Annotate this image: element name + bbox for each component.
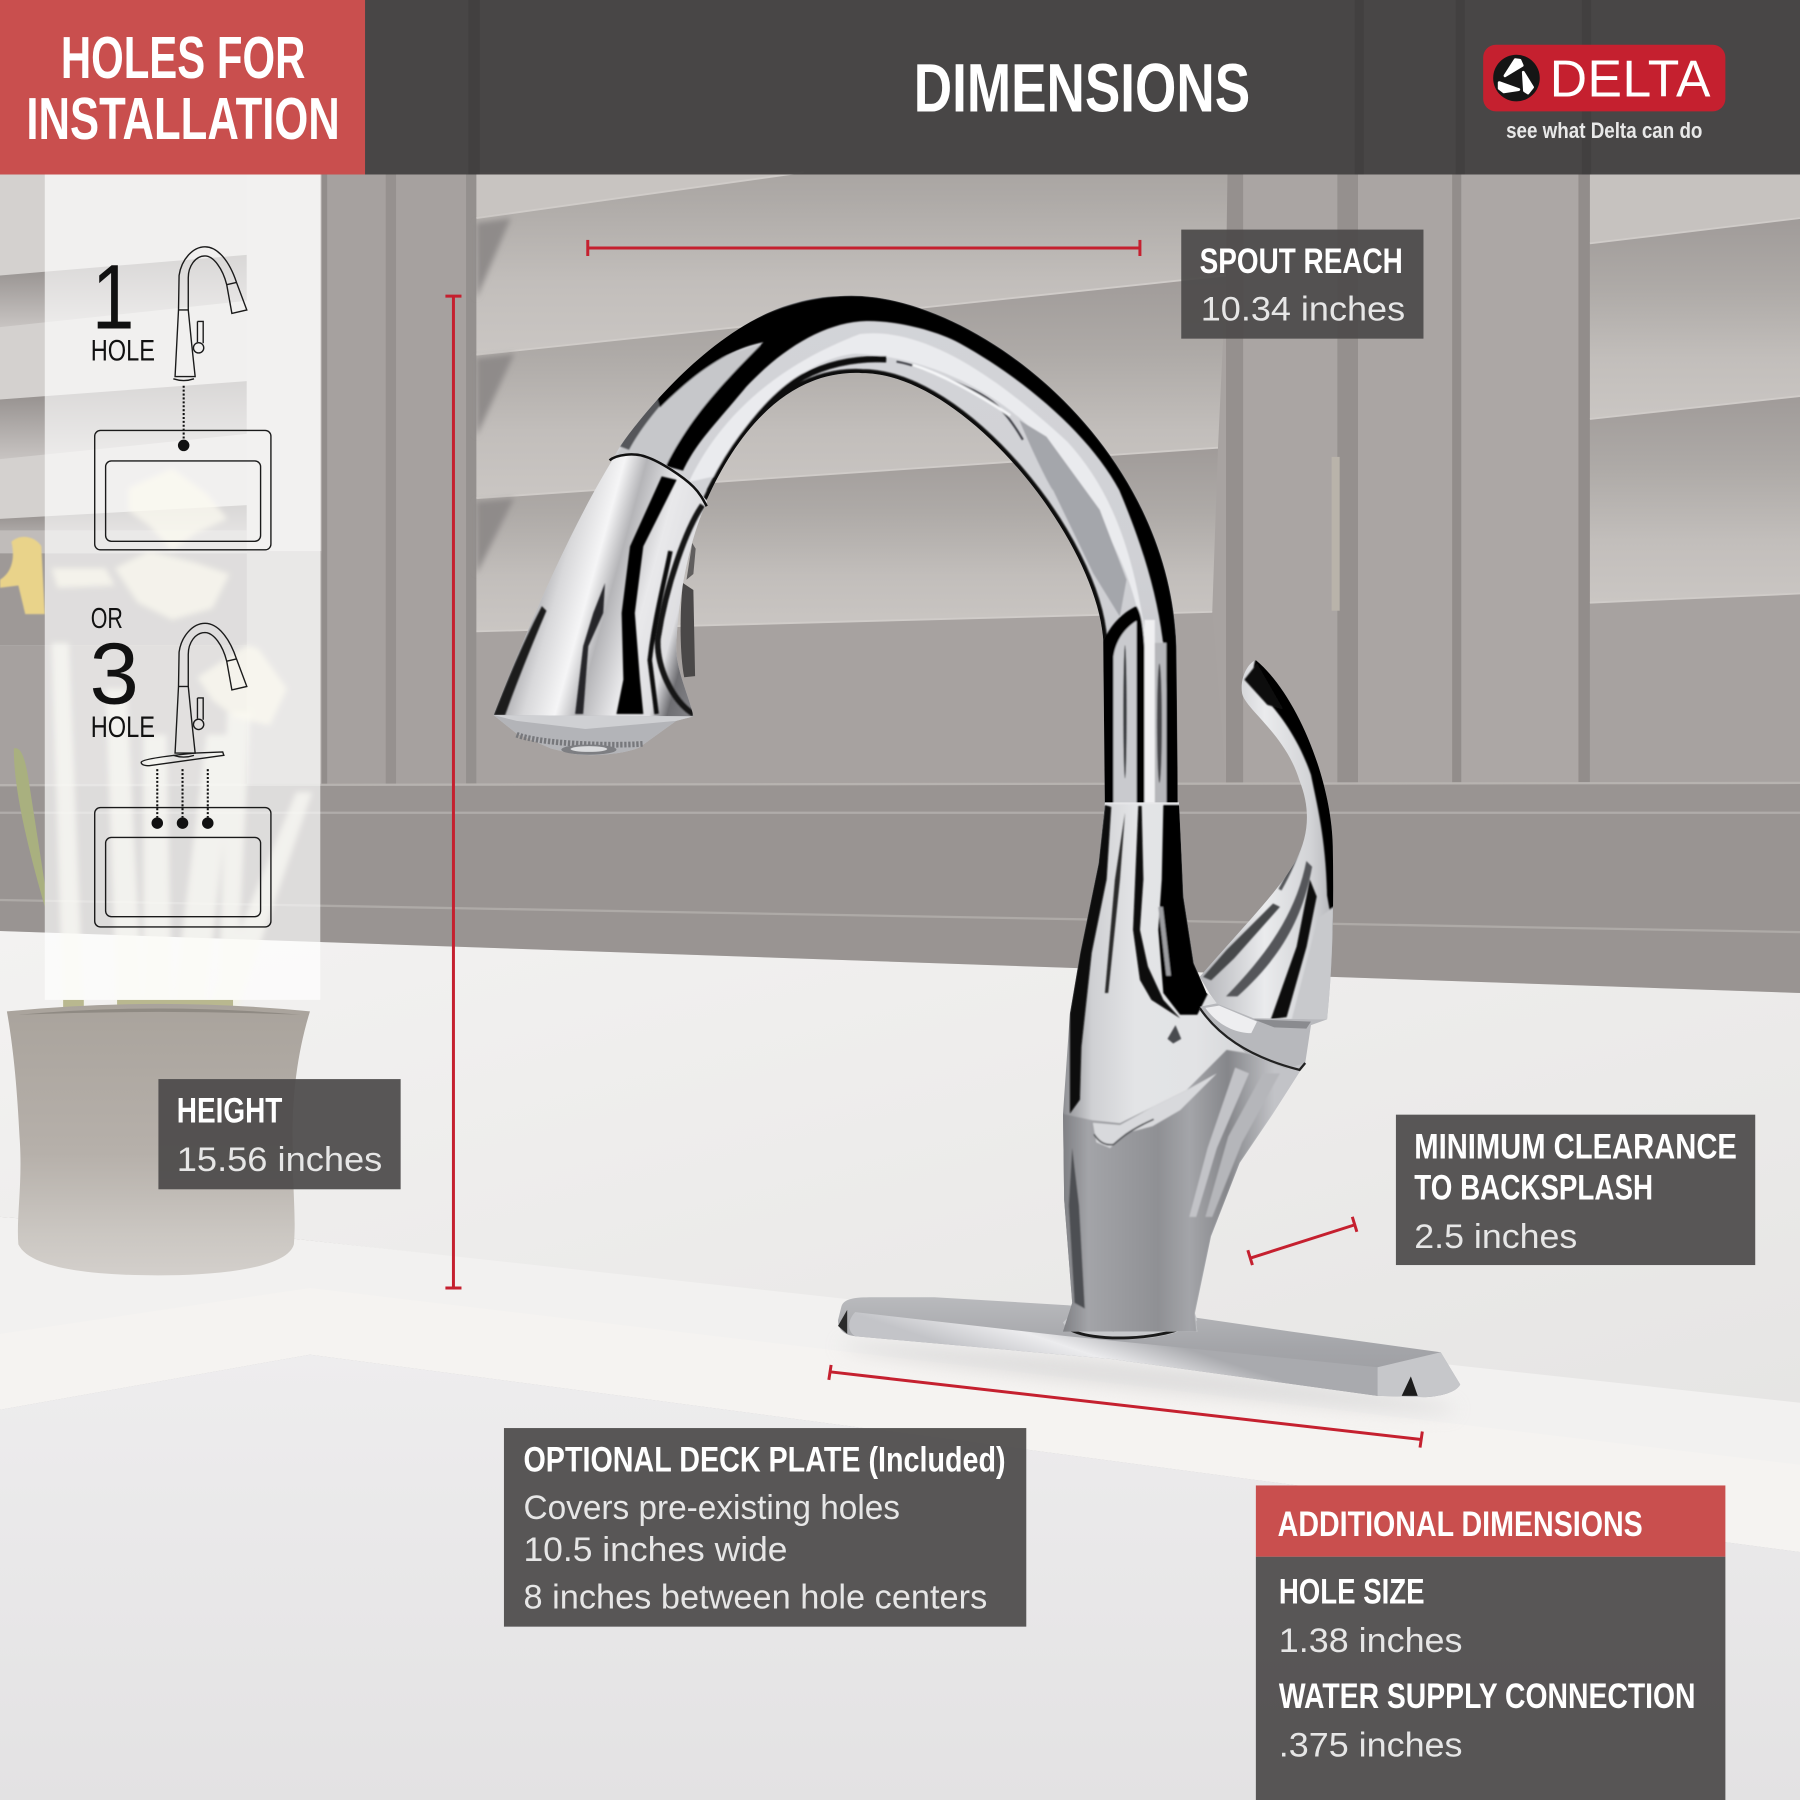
mid grey reflection: [1019, 420, 1126, 616]
hinge: [1332, 457, 1340, 611]
left black: [1070, 805, 1111, 1114]
cuff collar: [1200, 1003, 1327, 1070]
icon: three-hole installation diagram: [90, 603, 271, 927]
additional dimensions header: [1256, 1485, 1725, 1557]
spout: [494, 296, 1179, 809]
icon: one-hole installation diagram: [91, 246, 271, 550]
inner dark strip: [709, 359, 886, 491]
frame stiles: [321, 172, 1590, 792]
panel: additional dimensions: 1.38 inches: [1279, 1622, 1462, 1660]
additional dimensions header: ADDITIONAL DIMENSIONS: [1278, 1504, 1643, 1544]
lower body: [1061, 1050, 1309, 1334]
faucet line icon: [173, 247, 247, 381]
delta logo: DELTA: [1550, 49, 1711, 107]
countertop: [0, 1217, 1800, 1552]
deck plate: [838, 1297, 1460, 1397]
spout reach measure line: [588, 240, 1140, 256]
logo mark: [1493, 55, 1540, 101]
panel: additional dimensions: WATER SUPPLY CONNECTION: [1279, 1676, 1696, 1716]
delta logo: [1483, 45, 1725, 143]
inner edge line: [707, 373, 1104, 809]
daffodil flowers: [0, 468, 287, 726]
icon: three-hole installation diagram: OR: [91, 603, 123, 635]
ledge: [0, 783, 1800, 994]
backsplash: [0, 931, 1800, 1406]
faucet line icon with deck plate: [141, 623, 247, 766]
icon: one-hole installation diagram: 1: [92, 246, 134, 348]
sink basin: [0, 1355, 1800, 1800]
icon: three-hole installation diagram: HOLE: [91, 711, 155, 744]
flower pot: [7, 1004, 310, 1275]
center black: [1133, 806, 1180, 1018]
deck plate measure line: [829, 1365, 1422, 1448]
title: DIMENSIONS: [914, 49, 1250, 126]
panel: optional deck plate: 10.5 inches wide: [523, 1531, 788, 1569]
panel: optional deck plate: [504, 1428, 1026, 1627]
base ring: [1063, 1313, 1197, 1339]
panel: height: 15.56 inches: [177, 1141, 382, 1179]
spray head: [494, 453, 707, 716]
silver lens area: [613, 344, 763, 466]
red banner: [0, 0, 365, 174]
heading: holes for installation: [26, 24, 340, 152]
black outer band: [657, 296, 1179, 809]
icon: one-hole installation diagram: HOLE: [91, 334, 155, 367]
daffodil stems: [52, 643, 312, 1016]
panel: minimum clearance: TO BACKSPLASH: [1414, 1168, 1653, 1208]
body reflections: [1061, 801, 1309, 1334]
panel: additional dimensions: .375 inches: [1279, 1726, 1462, 1764]
right black: [1158, 805, 1208, 1015]
trigger button: [681, 583, 695, 677]
pipe black arch: [1103, 606, 1145, 809]
delta logo: see what Delta can do: [1506, 118, 1702, 143]
panel: optional deck plate: OPTIONAL DECK PLATE (Included): [523, 1440, 1006, 1480]
head seam: [610, 454, 707, 506]
panel: minimum clearance: MINIMUM CLEARANCE: [1414, 1126, 1737, 1166]
right louvers: [1590, 172, 1800, 783]
left window shutter: [0, 172, 324, 792]
panel: spout reach: 10.34 inches: [1201, 290, 1405, 328]
center louvers: [476, 115, 1228, 783]
panel: spout reach: SPOUT REACH: [1200, 241, 1403, 281]
height measure line: [445, 296, 461, 1288]
panel: optional deck plate: Covers pre-existing holes: [523, 1489, 900, 1527]
spout reflections: [613, 296, 1179, 809]
heading: holes for installation: INSTALLATION: [26, 85, 340, 152]
counter speckled edge: [0, 1288, 1800, 1552]
heading: holes for installation: HOLES FOR: [61, 24, 305, 91]
panel: minimum clearance: [1396, 1115, 1755, 1265]
panel: additional dimensions: [1256, 1485, 1725, 1800]
clearance measure line: [1248, 1217, 1357, 1265]
top banner dark: [0, 0, 1800, 174]
panel: optional deck plate: 8 inches between hole centers: [523, 1578, 987, 1616]
white panel backdrop for hole diagrams: [45, 174, 320, 1000]
chrome faucet: [494, 296, 1460, 1397]
daffodil stem bases: [63, 1000, 233, 1016]
inner white band: [689, 333, 1145, 646]
panel: additional dimensions: HOLE SIZE: [1279, 1572, 1425, 1612]
panel: spout reach: [1181, 230, 1423, 339]
deck plate shadow: [839, 1334, 1457, 1421]
daffodil leaf: [14, 748, 45, 907]
streak reflections: [897, 362, 1023, 440]
icon: three-hole installation diagram: 3: [90, 626, 139, 723]
handle: [1200, 658, 1336, 1021]
faucet body: [1061, 801, 1309, 1334]
handle reflections: [1203, 658, 1336, 1021]
panel: height: [158, 1079, 401, 1189]
nozzle: [494, 715, 693, 755]
panel: minimum clearance: 2.5 inches: [1414, 1218, 1577, 1256]
panel: height: HEIGHT: [177, 1091, 283, 1131]
